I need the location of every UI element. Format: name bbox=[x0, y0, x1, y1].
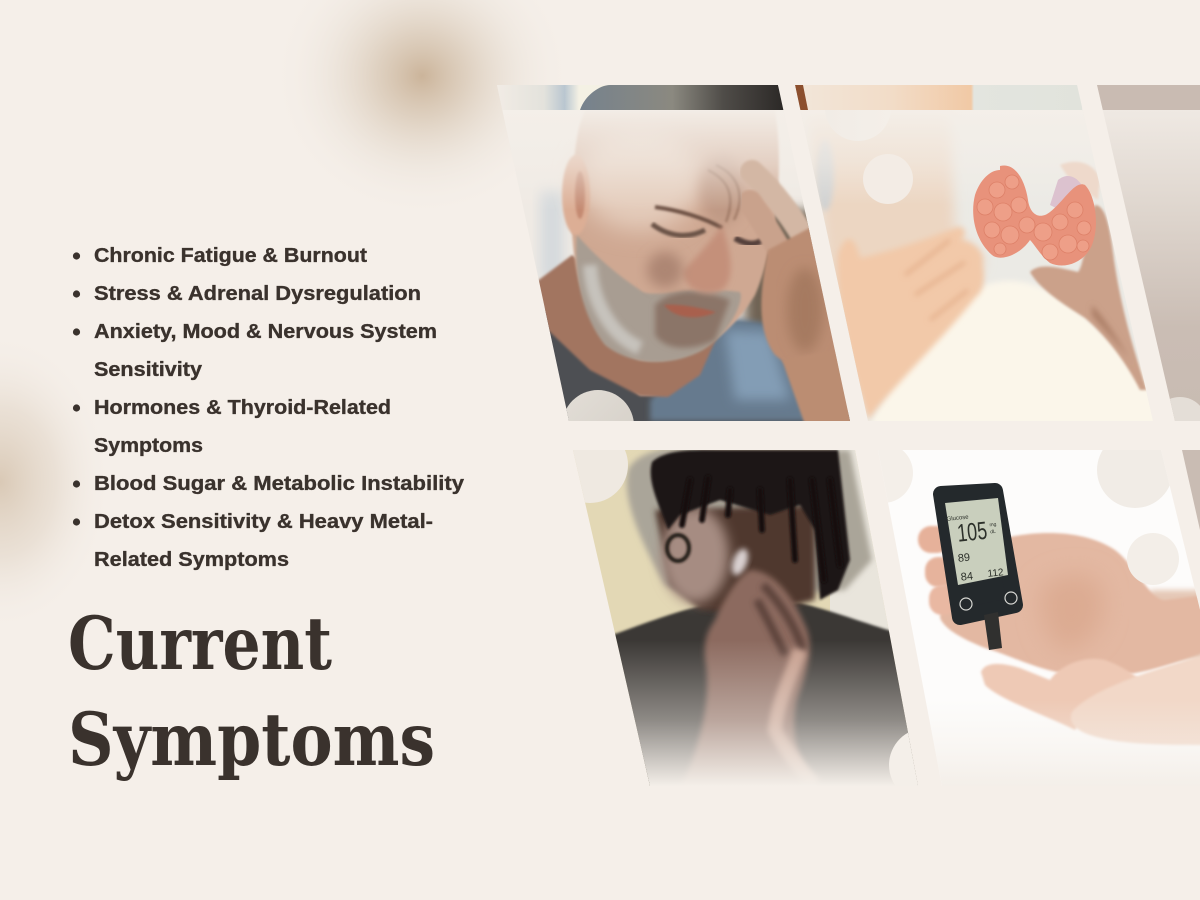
screen bbox=[945, 498, 1008, 585]
hair strip bbox=[580, 85, 785, 110]
glasses bbox=[667, 535, 689, 561]
shirt bbox=[544, 308, 850, 421]
meter buttons bbox=[960, 598, 972, 610]
meter readings: dL bbox=[990, 529, 996, 535]
bottom fade bbox=[870, 700, 1200, 786]
bullet: Hormones & Thyroid-Related Symptoms bbox=[73, 396, 391, 457]
bullet: Anxiety, Mood & Nervous System Sensitivity: Anxiety, Mood & Nervous System bbox=[94, 320, 437, 343]
title bbox=[68, 601, 435, 783]
bullet: Hormones & Thyroid-Related Symptoms: Hormones & Thyroid-Related bbox=[94, 396, 391, 419]
mouth bbox=[664, 305, 716, 317]
bottom fade bbox=[618, 648, 918, 786]
strip: brown edge bbox=[795, 85, 808, 110]
lower hand bbox=[981, 655, 1200, 745]
ear bbox=[562, 155, 590, 235]
beard bbox=[576, 235, 741, 362]
highlight on cheek bbox=[729, 546, 751, 578]
top fade bbox=[562, 110, 780, 204]
circle cut-outs bbox=[573, 450, 628, 503]
bullet: Stress & Adrenal Dysregulation: Stress & Adrenal Dysregulation bbox=[94, 282, 421, 305]
meter readings: 84 bbox=[960, 570, 974, 584]
blurred blob: top bbox=[272, 0, 572, 218]
sweater bbox=[870, 281, 1160, 425]
glucose meter bbox=[941, 491, 1017, 650]
photo: muted background panel bbox=[1095, 85, 1200, 451]
face bbox=[655, 505, 815, 615]
top strip of thyroid photo bbox=[790, 85, 1082, 110]
photo: person covering face bbox=[573, 450, 918, 786]
title: Current bbox=[68, 601, 332, 687]
bullet: Anxiety, Mood & Nervous System Sensitivity: Sensitivity bbox=[94, 358, 203, 381]
bullet: Detox Sensitivity & Heavy Metal-Related Symptoms: Detox Sensitivity & Heavy Metal- bbox=[94, 510, 433, 533]
bullet: Chronic Fatigue & Burnout: Chronic Fatigue & Burnout bbox=[94, 244, 367, 267]
circle cut-outs bbox=[853, 443, 913, 503]
blurred blob: left bbox=[0, 332, 112, 632]
meter readings: 105 bbox=[956, 517, 989, 548]
meter readings: mg bbox=[989, 522, 997, 528]
photo: man with headache bbox=[497, 85, 850, 421]
symptom list bbox=[73, 244, 465, 571]
meter readings: 89 bbox=[957, 552, 971, 565]
circle cut-out bbox=[1170, 397, 1200, 421]
back of hand background bbox=[1150, 590, 1200, 660]
title: Symptoms bbox=[68, 697, 435, 783]
bullet: Hormones & Thyroid-Related Symptoms: Symptoms bbox=[94, 434, 203, 457]
hand on throat bbox=[838, 227, 984, 420]
hands bbox=[690, 568, 813, 774]
holding hand bbox=[918, 526, 1200, 677]
test strip bbox=[984, 612, 1002, 650]
wrinkled brow bbox=[697, 168, 738, 224]
bullet: Blood Sugar & Metabolic Instability: Blood Sugar & Metabolic Instability bbox=[94, 472, 465, 495]
meter readings bbox=[946, 511, 1005, 584]
hair halo bbox=[627, 447, 872, 600]
nose bbox=[683, 225, 731, 293]
head bbox=[572, 110, 779, 361]
hand on temple bbox=[750, 172, 860, 425]
bullet: Anxiety, Mood & Nervous System Sensitivity bbox=[73, 320, 437, 381]
top fade bbox=[800, 110, 1084, 188]
bullet: Detox Sensitivity & Heavy Metal-Related Symptoms bbox=[73, 510, 433, 571]
meter readings: 112 bbox=[987, 567, 1005, 580]
meter readings: Glucose bbox=[946, 514, 970, 523]
circle cut-outs bbox=[849, 135, 876, 141]
photo: glucose meter bbox=[888, 450, 1200, 754]
photo: thyroid model bbox=[790, 75, 1160, 425]
neck bbox=[815, 135, 986, 383]
photo: corner sliver bbox=[1180, 450, 1200, 535]
thyroid model bbox=[973, 165, 1096, 266]
bullet: Detox Sensitivity & Heavy Metal-Related Symptoms: Related Symptoms bbox=[94, 548, 289, 571]
eyes and brows bbox=[655, 207, 722, 228]
hair bbox=[651, 450, 850, 600]
right hand holding model bbox=[1030, 162, 1147, 390]
circle cut-out bbox=[566, 390, 634, 421]
neck bbox=[536, 255, 720, 397]
shirt bbox=[612, 603, 930, 790]
